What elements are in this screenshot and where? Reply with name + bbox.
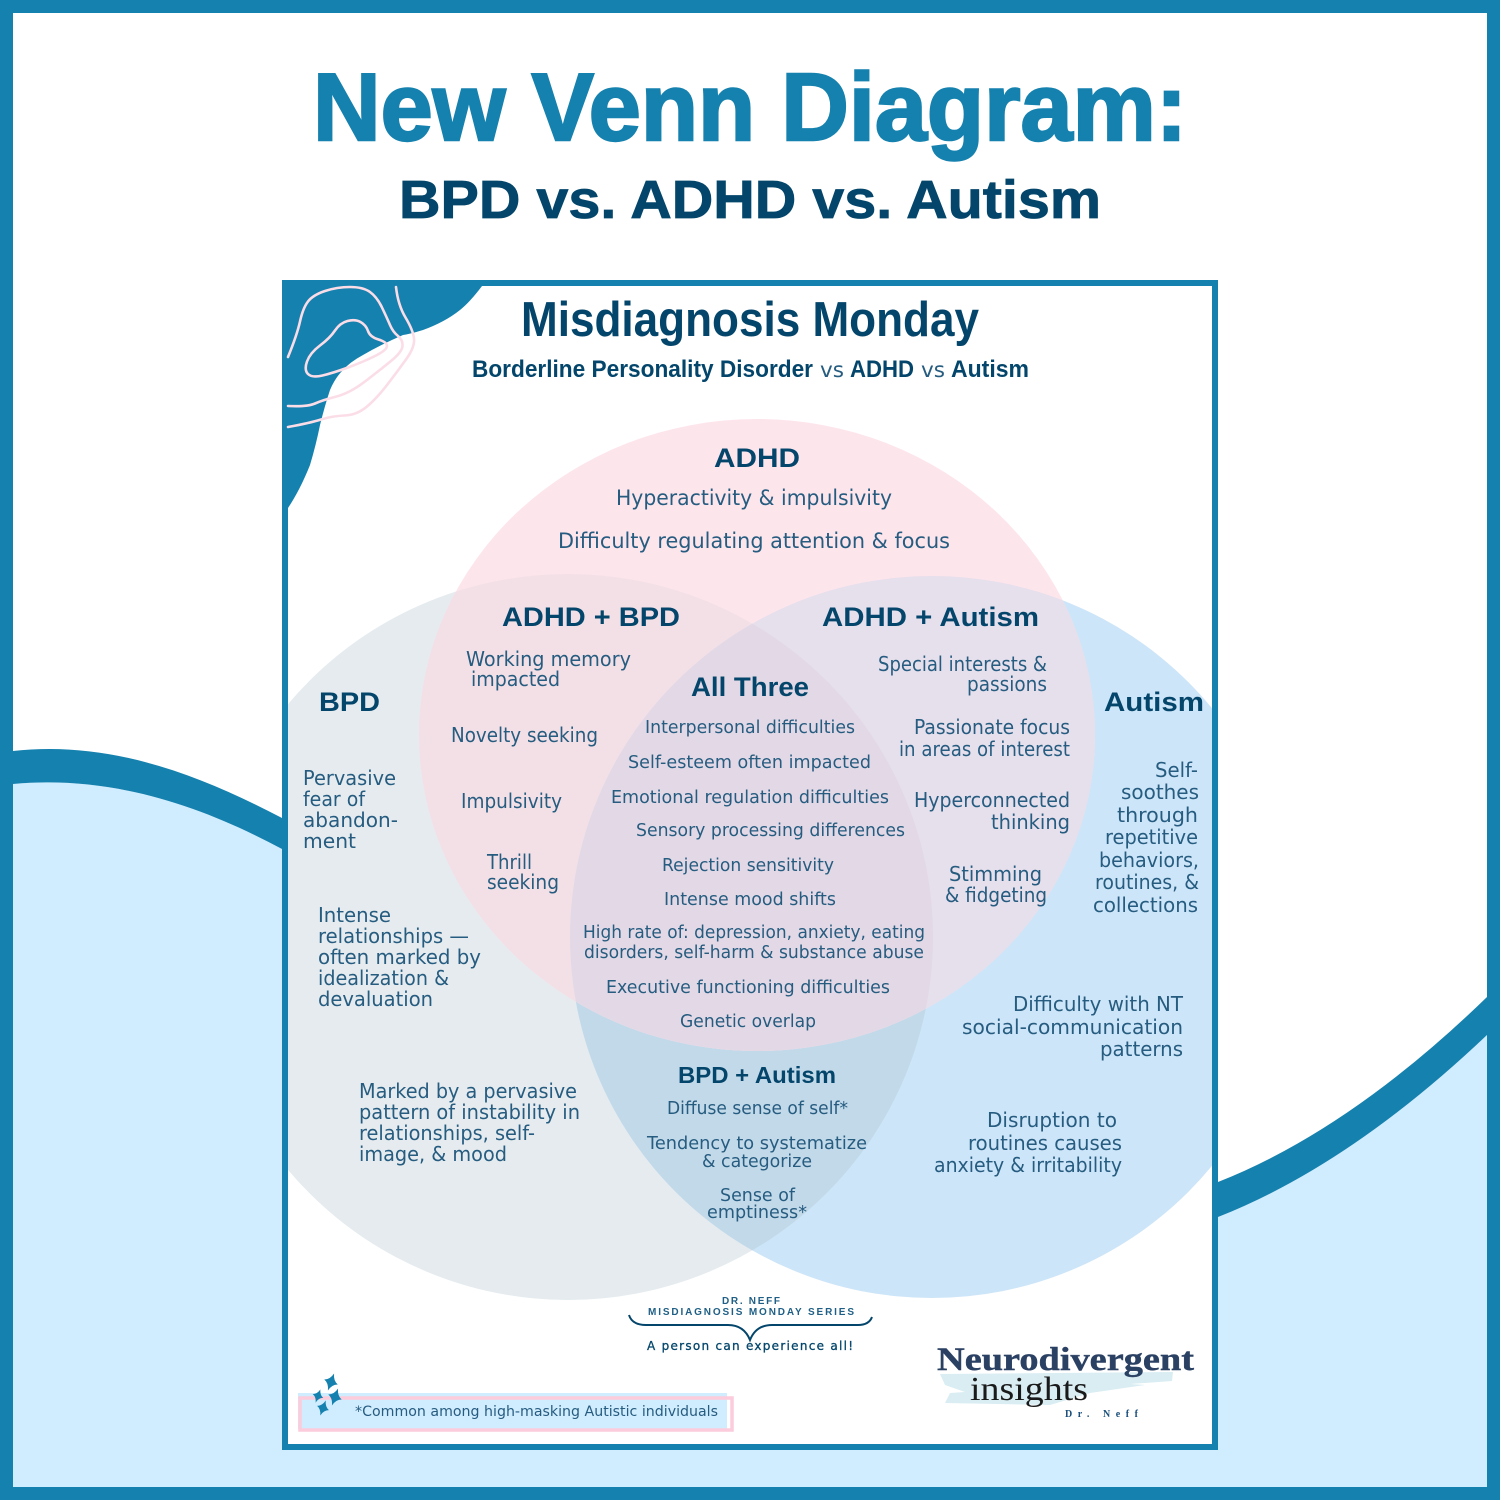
series credit with brace xyxy=(629,1296,872,1353)
section: Autism: Difficulty with NT xyxy=(1013,992,1184,1016)
section: BPD: often marked by xyxy=(318,945,481,969)
section: BPD: abandon- xyxy=(303,808,398,832)
card subheading: vs xyxy=(820,358,844,382)
section: ADHD + BPD: Impulsivity xyxy=(461,789,562,813)
section: All Three: Emotional regulation difficulties xyxy=(611,788,889,808)
section: ADHD + BPD: impacted xyxy=(471,667,560,691)
section: Autism: Disruption to xyxy=(987,1108,1117,1132)
series credit with brace: DR. NEFF xyxy=(722,1296,780,1307)
wave band: right xyxy=(1218,997,1487,1217)
section: All Three: High rate of: depression, anxiety, eating xyxy=(583,923,925,943)
section: All Three: Genetic overlap xyxy=(680,1012,816,1032)
section: ADHD + BPD xyxy=(451,602,680,894)
section: BPD xyxy=(303,687,580,1166)
logo: Neurodivergent Insights: Neurodivergent xyxy=(937,1342,1194,1378)
section: ADHD + BPD: Novelty seeking xyxy=(451,723,598,747)
section: Autism: routines causes xyxy=(968,1131,1122,1155)
section: BPD: idealization & xyxy=(318,966,449,990)
section: ADHD + Autism: ADHD + Autism xyxy=(822,602,1039,632)
card subheading xyxy=(472,356,1029,383)
section: ADHD + Autism xyxy=(822,602,1070,907)
section: BPD: ment xyxy=(303,829,356,853)
section: BPD + Autism: Sense of xyxy=(720,1186,796,1206)
section: ADHD + Autism: in areas of interest xyxy=(899,737,1070,761)
section: ADHD + BPD: Thrill xyxy=(486,850,532,874)
section: ADHD + Autism: Hyperconnected xyxy=(914,788,1070,812)
section: BPD + Autism: & categorize xyxy=(702,1152,812,1172)
main title: New Venn Diagram: xyxy=(313,54,1187,161)
card subheading: Borderline Personality Disorder xyxy=(472,356,813,383)
section: All Three: Sensory processing differences xyxy=(636,821,905,841)
decorative corner blob xyxy=(288,286,482,508)
section: BPD + Autism: Tendency to systematize xyxy=(646,1134,867,1154)
section: ADHD + BPD: seeking xyxy=(487,870,559,894)
section: All Three: All Three xyxy=(691,672,809,702)
section: ADHD + Autism: & fidgeting xyxy=(945,883,1047,907)
section: Autism: through xyxy=(1117,803,1198,827)
section: Autism: repetitive xyxy=(1105,825,1198,849)
section: All Three xyxy=(583,672,925,1032)
section: Autism: Self- xyxy=(1155,758,1198,782)
section: ADHD: ADHD xyxy=(714,443,800,473)
series credit with brace: MISDIAGNOSIS MONDAY SERIES xyxy=(648,1307,854,1318)
section: BPD: pattern of instability in xyxy=(359,1100,580,1124)
section: BPD: image, & mood xyxy=(359,1142,507,1166)
card subheading: Autism xyxy=(951,356,1029,383)
section: ADHD + Autism: Special interests & xyxy=(878,652,1047,676)
section: ADHD + BPD: Working memory xyxy=(466,647,631,671)
section: BPD + Autism xyxy=(646,1062,867,1223)
section: BPD: BPD xyxy=(319,687,380,717)
section: Autism: behaviors, xyxy=(1099,848,1199,872)
venn diagram circles xyxy=(288,419,1212,1300)
section: ADHD xyxy=(558,443,950,553)
logo: Neurodivergent Insights xyxy=(937,1342,1194,1420)
logo: Neurodivergent Insights: insights xyxy=(970,1371,1088,1408)
card subheading: vs xyxy=(921,358,945,382)
footnote box xyxy=(298,1393,732,1430)
wave band: left xyxy=(13,749,282,849)
section: All Three: Interpersonal difficulties xyxy=(645,718,855,738)
section: BPD + Autism: emptiness* xyxy=(707,1203,807,1223)
section: BPD: devaluation xyxy=(318,987,433,1011)
section: Autism: routines, & xyxy=(1095,870,1199,894)
section: Autism: collections xyxy=(1093,893,1198,917)
section: BPD: Pervasive xyxy=(303,766,396,790)
footnote box: *Common among high-masking Autistic individuals xyxy=(355,1404,718,1420)
section: ADHD + Autism: Passionate focus xyxy=(914,715,1070,739)
card heading: Misdiagnosis Monday xyxy=(521,293,979,347)
section: All Three: Executive functioning difficulties xyxy=(606,978,890,998)
section: All Three: disorders, self-harm & substance abuse xyxy=(584,943,924,963)
section: BPD: relationships, self- xyxy=(359,1121,535,1145)
section: Autism: patterns xyxy=(1100,1037,1183,1061)
section: All Three: Rejection sensitivity xyxy=(662,856,834,876)
section: BPD + Autism: BPD + Autism xyxy=(678,1062,836,1088)
section: Autism: Autism xyxy=(1104,687,1204,717)
section: ADHD + Autism: Stimming xyxy=(949,862,1042,886)
card subheading: ADHD xyxy=(850,356,914,383)
section: ADHD + Autism: passions xyxy=(967,672,1047,696)
section: BPD: Marked by a pervasive xyxy=(359,1079,577,1103)
section: BPD + Autism: Diffuse sense of self* xyxy=(667,1099,848,1119)
section: All Three: Self-esteem often impacted xyxy=(628,753,871,773)
panel: misdiagnosis monday card xyxy=(282,280,1218,1450)
section: ADHD + Autism: thinking xyxy=(991,810,1070,834)
section: ADHD + BPD: ADHD + BPD xyxy=(502,602,680,632)
section: BPD: Intense xyxy=(318,903,391,927)
section: Autism: soothes xyxy=(1121,780,1199,804)
icon: sparkles xyxy=(310,1371,345,1418)
section: BPD: relationships — xyxy=(318,924,469,948)
series credit with brace: A person can experience all! xyxy=(647,1339,853,1353)
section: All Three: Intense mood shifts xyxy=(664,890,836,910)
section: Autism: social-communication xyxy=(962,1015,1183,1039)
section: Autism: anxiety & irritability xyxy=(934,1153,1122,1177)
section: Autism xyxy=(934,687,1204,1177)
section: BPD: fear of xyxy=(303,787,366,811)
section: ADHD: Hyperactivity & impulsivity xyxy=(616,486,892,510)
subtitle: BPD vs. ADHD vs. Autism xyxy=(399,170,1101,230)
logo: Neurodivergent Insights: Dr. Neff xyxy=(1065,1409,1139,1420)
section: ADHD: Difficulty regulating attention & focus xyxy=(558,529,950,553)
